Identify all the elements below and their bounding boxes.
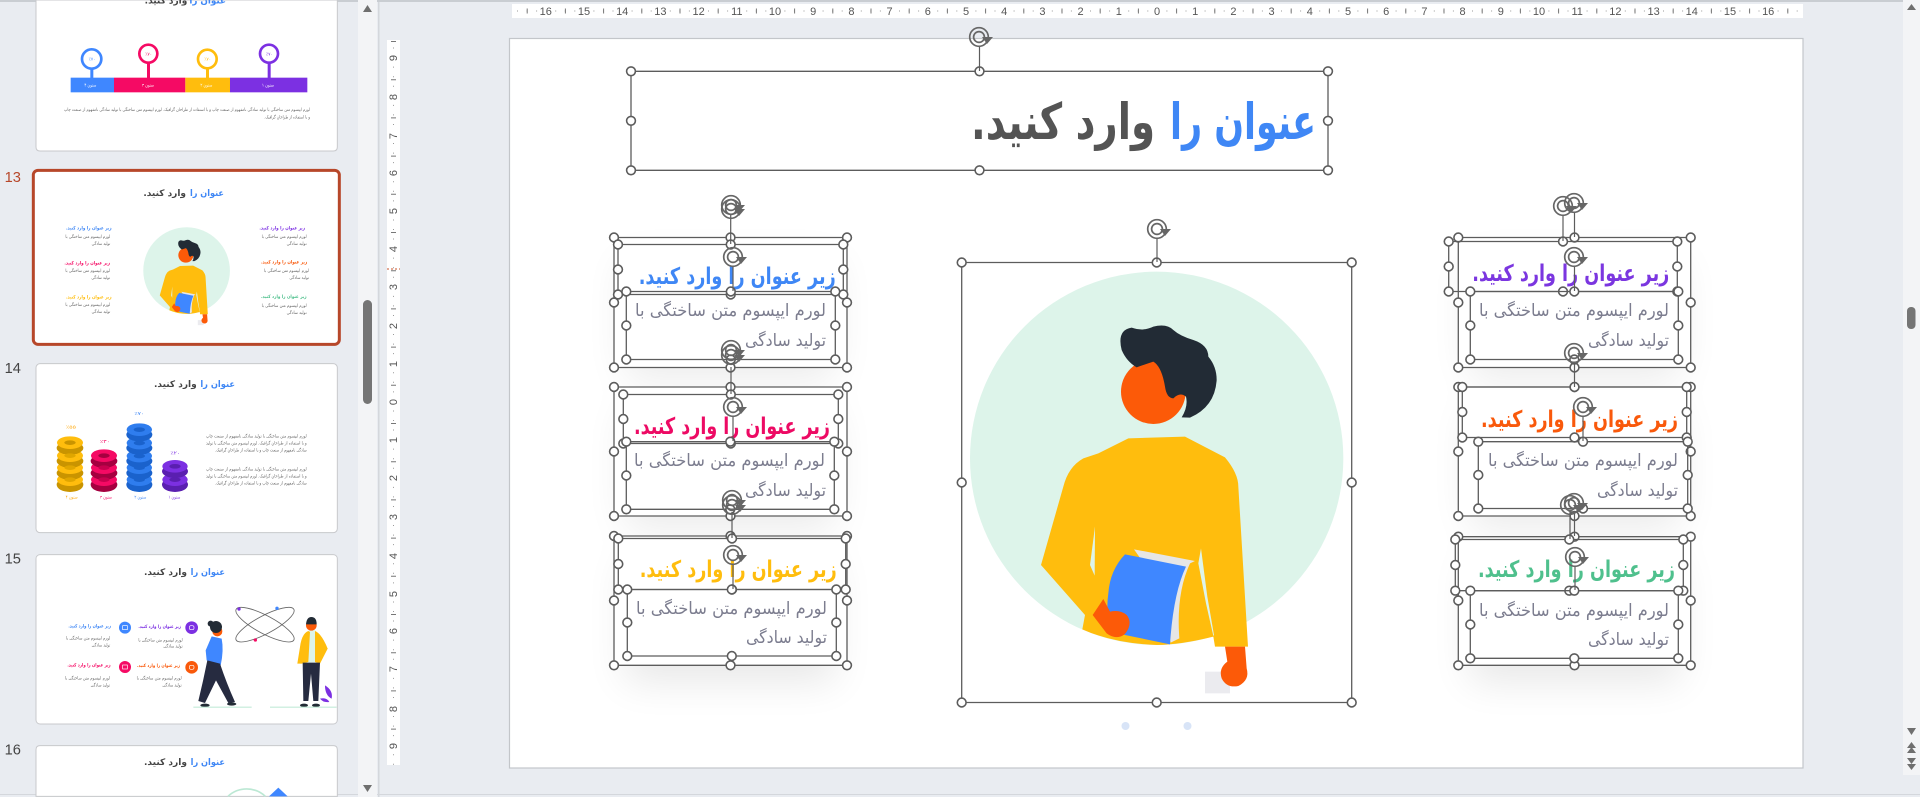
vertical ruler: 9 bbox=[388, 55, 400, 61]
soft shadows behind text groups bbox=[625, 262, 1680, 682]
vertical ruler: 4 bbox=[388, 553, 400, 559]
thumbnail: slide 16: 16 bbox=[5, 743, 21, 759]
thumbnail: slide 13 (selected): تولید سادگی bbox=[91, 275, 111, 281]
horizontal ruler: 10 bbox=[769, 6, 781, 18]
thumbnail: slide 13 (selected): وارد کنید. bbox=[143, 189, 186, 199]
thumbnail: slide 14: ستون ۱ bbox=[168, 495, 181, 500]
text block: right bottom: لورم ایپسوم متن ساختگی با bbox=[1479, 600, 1669, 621]
thumbnail: slide 15: تولید سادگی bbox=[162, 682, 182, 688]
vertical ruler: 3 bbox=[388, 284, 400, 290]
horizontal ruler: 11 bbox=[1571, 6, 1583, 18]
horizontal ruler: 12 bbox=[692, 6, 705, 18]
thumbnail: slide 13 (selected): لورم ایپسوم متن ساختگی با bbox=[65, 302, 110, 308]
thumbnail: slide 15: زیر عنوان را وارد کنید. bbox=[67, 662, 111, 668]
thumbnail: slide 16: وارد کنید. bbox=[144, 758, 187, 768]
vertical ruler bbox=[387, 40, 400, 765]
thumbnail: slide 13 (selected): تولید سادگی bbox=[287, 241, 307, 247]
text block: left top: لورم ایپسوم متن ساختگی با bbox=[635, 300, 826, 321]
horizontal ruler: 9 bbox=[1498, 6, 1504, 18]
thumbnail: slide 13 (selected) bbox=[5, 170, 339, 344]
horizontal ruler: 6 bbox=[925, 6, 931, 18]
vertical ruler: 2 bbox=[388, 475, 400, 481]
horizontal ruler bbox=[512, 4, 1803, 18]
panel: slide thumbnails bbox=[5, 0, 339, 796]
horizontal ruler: 3 bbox=[1039, 6, 1045, 18]
thumbnail: slide 13 (selected): تولید سادگی bbox=[92, 309, 111, 315]
horizontal ruler: 5 bbox=[1345, 6, 1351, 18]
text block: left top: تولید سادگی bbox=[745, 330, 826, 351]
text block: left top: زیر عنوان را وارد کنید. bbox=[639, 264, 836, 290]
thumbnail: slide 14: 14 bbox=[5, 361, 21, 377]
thumbnail: slide 14: ستون ۴ bbox=[66, 495, 78, 500]
text block: left middle: زیر عنوان را وارد کنید. bbox=[634, 414, 830, 440]
thumbnail: slide 14: وارد کنید. bbox=[154, 380, 197, 390]
thumbnail: slide 13 (selected): تولید سادگی bbox=[287, 310, 307, 316]
text block: right middle bbox=[1481, 407, 1678, 501]
vertical ruler: 5 bbox=[388, 208, 400, 214]
thumbnail: slide 14: سادگی نامفهوم از صنعت چاپ و با استفاده از طراحان گرافیک. bbox=[215, 447, 307, 453]
thumbnail: slide 15: 15 bbox=[5, 552, 21, 568]
thumbnail: slide 16: عنوان را bbox=[191, 758, 225, 768]
text block: left middle: تولید سادگی bbox=[745, 480, 826, 501]
vertical ruler: 6 bbox=[388, 628, 400, 634]
thumbnail: slide 12: ستون ۳ bbox=[142, 83, 154, 88]
thumbnail: slide 13 (selected): زیر عنوان را وارد کنید. bbox=[261, 259, 308, 265]
horizontal ruler: 11 bbox=[731, 6, 743, 18]
horizontal ruler: 12 bbox=[1609, 6, 1622, 18]
vertical ruler: 0 bbox=[388, 399, 400, 405]
horizontal ruler: 1 bbox=[1116, 6, 1122, 18]
text block: right bottom bbox=[1478, 557, 1675, 650]
horizontal ruler: 1 bbox=[1192, 6, 1198, 18]
thumbnail: slide 12: ستون ۲ bbox=[200, 83, 213, 88]
thumbnail: slide 13 (selected): زیر عنوان را وارد کنید. bbox=[259, 225, 305, 231]
text block: right middle: لورم ایپسوم متن ساختگی با bbox=[1488, 450, 1678, 471]
horizontal ruler: 16 bbox=[540, 6, 552, 18]
horizontal ruler: 4 bbox=[1001, 6, 1007, 18]
thumbnail: slide 15 bbox=[5, 552, 337, 724]
thumbnail: slide 12: ستون ۴ bbox=[84, 83, 97, 88]
thumbnail: slide 13 (selected): تولید سادگی bbox=[92, 241, 111, 247]
thumbnail: slide 15: زیر عنوان را وارد کنید. bbox=[138, 624, 181, 630]
thumbnail: slide 12: ٪۷۰ bbox=[204, 58, 211, 63]
horizontal ruler: 15 bbox=[1724, 6, 1736, 18]
vertical ruler: 2 bbox=[388, 323, 400, 329]
horizontal ruler: 4 bbox=[1307, 6, 1313, 18]
thumbnail: slide 14: و با استفاده از طراحان گرافیک. لورم ایپسوم متن ساختگی با تولید bbox=[206, 473, 307, 479]
thumbnail: slide 12: ٪۷۰ bbox=[145, 52, 152, 57]
title: وارد کنید. bbox=[971, 93, 1155, 152]
thumbnail: slide 12: ٪۷۰ bbox=[266, 52, 273, 57]
thumbnail: slide 13 (selected): زیر عنوان را وارد کنید. bbox=[261, 294, 307, 300]
title bbox=[971, 93, 1316, 152]
horizontal ruler: 8 bbox=[848, 6, 854, 18]
text block: left middle bbox=[634, 414, 830, 501]
horizontal ruler: 2 bbox=[1230, 6, 1236, 18]
horizontal ruler: 3 bbox=[1269, 6, 1275, 18]
thumbnail: slide 15: زیر عنوان را وارد کنید. bbox=[68, 623, 111, 629]
horizontal ruler: 7 bbox=[1421, 6, 1427, 18]
text block: left middle: لورم ایپسوم متن ساختگی با bbox=[634, 450, 825, 471]
vertical ruler: 9 bbox=[388, 743, 400, 749]
thumbnail: slide 14: و با استفاده از طراحان گرافیک. لورم ایپسوم متن ساختگی با تولید bbox=[206, 440, 307, 446]
thumbnail: slide 12: لورم ایپسوم متن ساختگی با تولید سادگی نامفهوم از صنعت چاپ و با استفاده از طراحان گرافیک. لورم ایپسوم متن ساختگی با تولید سادگی نامفهوم از صنعت چاپ bbox=[64, 107, 310, 113]
vertical ruler: 7 bbox=[388, 666, 400, 672]
text block: left top bbox=[635, 264, 836, 351]
text block: left bottom bbox=[636, 557, 837, 648]
thumbnail: slide 15: لورم ایپسوم متن ساختگی با bbox=[138, 637, 183, 643]
thumbnail: slide 14: ستون ۳ bbox=[100, 495, 112, 500]
vertical ruler: 6 bbox=[388, 170, 400, 176]
text block: right top: لورم ایپسوم متن ساختگی با bbox=[1479, 300, 1669, 321]
horizontal ruler: 14 bbox=[616, 6, 628, 18]
thumbnail: slide 13 (selected): لورم ایپسوم متن ساختگی با bbox=[262, 234, 307, 240]
horizontal ruler: 5 bbox=[963, 6, 969, 18]
thumbnail: slide 12 bbox=[36, 0, 337, 151]
thumbnail: slide 15: لورم ایپسوم متن ساختگی با bbox=[137, 675, 182, 681]
thumbnail: slide 13 (selected): عنوان را bbox=[190, 189, 224, 199]
thumbnail: slide 14: ٪۷۰ bbox=[134, 412, 144, 417]
text block: right bottom: تولید سادگی bbox=[1588, 629, 1669, 650]
text block: left bottom: تولید سادگی bbox=[746, 627, 827, 648]
thumbnail: slide 15: وارد کنید. bbox=[144, 568, 187, 578]
vertical ruler: 3 bbox=[388, 514, 400, 520]
horizontal ruler: 10 bbox=[1533, 6, 1545, 18]
thumbnail: slide 15: زیر عنوان را وارد کنید. bbox=[137, 663, 180, 669]
horizontal ruler: 13 bbox=[654, 6, 667, 18]
text block: right top bbox=[1472, 261, 1669, 351]
right scrollbar bbox=[1903, 0, 1920, 775]
thumbnail: slide 13 (selected): زیر عنوان را وارد کنید. bbox=[64, 260, 110, 266]
text block: right top: زیر عنوان را وارد کنید. bbox=[1472, 261, 1669, 287]
horizontal ruler: 14 bbox=[1686, 6, 1698, 18]
thumbnail: slide 13 (selected): 13 bbox=[5, 170, 21, 186]
thumbnail: slide 15: عنوان را bbox=[191, 568, 225, 578]
horizontal ruler: 15 bbox=[578, 6, 590, 18]
vertical ruler: 4 bbox=[388, 246, 400, 252]
thumbnail: slide 13 (selected): زیر عنوان را وارد کنید. bbox=[66, 225, 112, 231]
text block: right bottom: زیر عنوان را وارد کنید. bbox=[1478, 557, 1675, 583]
vertical ruler: 8 bbox=[388, 706, 400, 712]
thumbnail: slide 14 bbox=[5, 361, 337, 533]
horizontal ruler: 8 bbox=[1460, 6, 1466, 18]
thumbnail: slide 13 (selected): لورم ایپسوم متن ساختگی با bbox=[65, 234, 110, 240]
selection frames and handles bbox=[614, 28, 1691, 702]
thumbnail: slide 14: لورم ایپسوم متن ساختگی با تولید سادگی نامفهوم از صنعت چاپ bbox=[206, 433, 307, 439]
thumbnail: slide 14: ستون ۲ bbox=[134, 495, 147, 500]
horizontal ruler: 9 bbox=[810, 6, 816, 18]
thumbnail: slide 13 (selected): تولید سادگی bbox=[289, 275, 310, 281]
thumbnail: slide 13 (selected): لورم ایپسوم متن ساختگی با bbox=[264, 268, 309, 274]
text block: right middle: تولید سادگی bbox=[1597, 480, 1678, 501]
thumbnail: slide 15: تولید سادگی bbox=[92, 642, 111, 648]
horizontal ruler: 13 bbox=[1647, 6, 1660, 18]
thumbnail: slide 12: ٪۷۰ bbox=[89, 58, 95, 63]
thumbnail: slide 12: و با استفاده از طراحان گرافیک. bbox=[264, 114, 310, 120]
text block: right top: تولید سادگی bbox=[1588, 330, 1669, 351]
thumbnail: slide 14: لورم ایپسوم متن ساختگی با تولید سادگی نامفهوم از صنعت چاپ bbox=[206, 466, 307, 472]
thumbnail: slide 13 (selected): لورم ایپسوم متن ساختگی با bbox=[262, 303, 307, 309]
thumbnail: slide 15: تولید سادگی bbox=[163, 644, 183, 650]
title: عنوان را bbox=[1170, 93, 1316, 152]
thumbnail: slide 16 bbox=[5, 743, 337, 796]
panel: main slide bbox=[510, 28, 1803, 768]
vertical ruler: 8 bbox=[388, 94, 400, 100]
vertical ruler: 1 bbox=[388, 437, 400, 443]
illustration: person with book in mint circle bbox=[970, 272, 1343, 693]
text block: right middle: زیر عنوان را وارد کنید. bbox=[1481, 407, 1678, 433]
vertical ruler: 1 bbox=[388, 361, 400, 367]
thumbnail: slide 15: تولید سادگی bbox=[91, 682, 111, 688]
thumbnail: slide 14: ٪۳۰ bbox=[100, 439, 110, 445]
horizontal ruler: 0 bbox=[1154, 6, 1160, 18]
thumbnail: slide 13 (selected): زیر عنوان را وارد کنید. bbox=[66, 294, 112, 300]
vertical ruler: 5 bbox=[388, 591, 400, 597]
thumbnail: slide 15: لورم ایپسوم متن ساختگی با bbox=[66, 635, 110, 641]
text block: left bottom: زیر عنوان را وارد کنید. bbox=[640, 557, 837, 583]
text block: left bottom: لورم ایپسوم متن ساختگی با bbox=[636, 598, 827, 619]
thumbnail: slide 14: عنوان را bbox=[200, 380, 235, 390]
pagination dots bbox=[1122, 722, 1192, 730]
thumbnail: slide 13 (selected): لورم ایپسوم متن ساختگی با bbox=[65, 268, 110, 274]
thumbnail scrollbar bbox=[358, 0, 380, 797]
horizontal ruler: 6 bbox=[1383, 6, 1389, 18]
thumbnail: slide 14: ٪۲۰ bbox=[170, 450, 180, 456]
thumbnail: slide 14: سادگی نامفهوم از صنعت چاپ و با استفاده از طراحان گرافیک. bbox=[215, 480, 307, 486]
thumbnail: slide 12: ستون ۱ bbox=[262, 83, 274, 88]
horizontal ruler: 2 bbox=[1078, 6, 1084, 18]
thumbnail: slide 14: ٪۵۵ bbox=[66, 426, 77, 431]
vertical ruler: 7 bbox=[388, 133, 400, 139]
thumbnail: slide 15: لورم ایپسوم متن ساختگی با bbox=[65, 675, 110, 681]
horizontal ruler: 16 bbox=[1762, 6, 1774, 18]
horizontal ruler: 7 bbox=[887, 6, 893, 18]
